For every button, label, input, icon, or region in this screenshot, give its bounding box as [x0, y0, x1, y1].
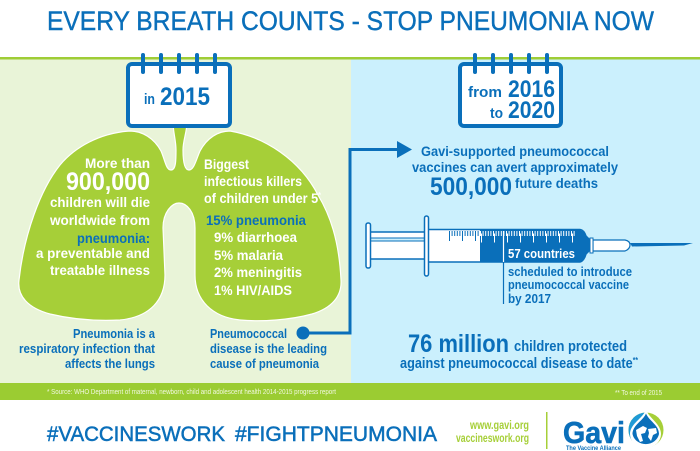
- text: 76 million children protected: children protected: [514, 338, 627, 355]
- calendar: from 2016 to 2020: to: [490, 105, 503, 122]
- footnote bar: ** To end of 2015: [615, 388, 662, 397]
- text: 900,000 children will die: treatable illness: [50, 262, 150, 278]
- text: pneumonia definition: affects the lungs: [65, 356, 155, 371]
- text: scheduled to introduce vaccine: scheduled to introduce: [508, 264, 632, 279]
- text: biggest infectious killers list: 1% HIV/AIDS: [214, 282, 292, 298]
- text: pneumonia definition: [19, 326, 156, 371]
- text: 900,000 children will die: 900,000: [66, 168, 150, 196]
- text: leading cause of pneumonia: [210, 326, 327, 371]
- text: leading cause of pneumonia: Pneumococcal: [210, 326, 287, 341]
- text: 76 million children protected: [400, 330, 639, 372]
- text: biggest infectious killers list: [204, 156, 322, 298]
- text: scheduled to introduce vaccine: by 2017: [508, 291, 551, 306]
- text: scheduled to introduce vaccine: pneumococcal vaccine: [508, 277, 629, 292]
- text: 76 million children protected: 76 million: [408, 330, 509, 358]
- text: biggest infectious killers list: of children under 5: [204, 190, 330, 206]
- text: 900,000 children will die: a preventable and: [36, 245, 150, 261]
- arrow: from pneumococcal disease to vaccines: [296, 141, 412, 340]
- text: pneumonia definition: Pneumonia is a: [73, 326, 156, 341]
- top green rule: [0, 57, 700, 60]
- syringe: [366, 216, 693, 304]
- text: 500,000 future deaths: 500,000: [430, 173, 512, 201]
- text: scheduled to introduce vaccine: [508, 264, 632, 306]
- calendar: from 2016 to 2020: from: [468, 84, 502, 101]
- text: 76 million children protected: **: [633, 356, 639, 365]
- text: pneumonia definition: respiratory infection that: [19, 341, 156, 356]
- website links: [456, 418, 529, 445]
- website links: www.gavi.org: [469, 418, 529, 432]
- text: biggest infectious killers list: 15% pneumonia: [206, 212, 306, 228]
- syringe: 57 countries: [508, 246, 575, 261]
- text: 76 million children protected: against pneumococcal disease to date: [400, 355, 674, 372]
- hashtags: [47, 423, 437, 446]
- text: leading cause of pneumonia: disease is the leading: [210, 341, 327, 356]
- title: EVERY BREATH COUNTS - STOP PNEUMONIA NOW: [47, 6, 654, 36]
- hashtags: #FIGHTPNEUMONIA: [235, 423, 437, 446]
- text: biggest infectious killers list: 2% meningitis: [214, 264, 302, 280]
- calendar: from 2016 to 2020: [460, 55, 561, 126]
- text: 900,000 children will die: worldwide from: [49, 212, 150, 228]
- text: 900,000 children will die: pneumonia:: [77, 230, 150, 246]
- calendar: in 2015: in: [144, 91, 155, 108]
- calendar: from 2016 to 2020: 2016: [508, 76, 555, 103]
- text: 900,000 children will die: [36, 155, 150, 278]
- footnote bar: * Source: WHO Department of maternal, newborn, child and adolescent health 2014-2015 progress report: [47, 387, 337, 396]
- panel: 2016 to 2020 background: [351, 59, 700, 383]
- text: biggest infectious killers list: 5% malaria: [214, 247, 283, 263]
- text: biggest infectious killers list: 9% diarrhoea: [214, 229, 297, 245]
- Gavi logo: [563, 410, 664, 451]
- footnote bar: [0, 383, 700, 400]
- lungs illustration: [19, 122, 341, 321]
- text: biggest infectious killers list: *: [318, 191, 322, 200]
- text: 500,000 future deaths: [412, 143, 618, 201]
- text: biggest infectious killers list: infectious killers: [204, 173, 302, 189]
- text: 500,000 future deaths: vaccines can avert approximately: [412, 159, 618, 175]
- calendar: in 2015: [128, 55, 230, 126]
- calendar: from 2016 to 2020: 2020: [508, 97, 555, 124]
- text: 900,000 children will die: children will die: [50, 194, 150, 210]
- website links: vaccineswork.org: [456, 431, 529, 445]
- text: 500,000 future deaths: Gavi-supported pneumococcal: [421, 143, 609, 159]
- text: 900,000 children will die: More than: [85, 155, 150, 171]
- text: 500,000 future deaths: future deaths: [515, 175, 598, 191]
- calendar: in 2015: 2015: [160, 83, 210, 111]
- text: leading cause of pneumonia: cause of pneumonia: [210, 356, 320, 371]
- panel: 2015 background: [0, 59, 351, 383]
- text: biggest infectious killers list: Biggest: [204, 156, 249, 172]
- Gavi logo: Gavi: [563, 415, 625, 450]
- hashtags: #VACCINESWORK: [47, 423, 225, 446]
